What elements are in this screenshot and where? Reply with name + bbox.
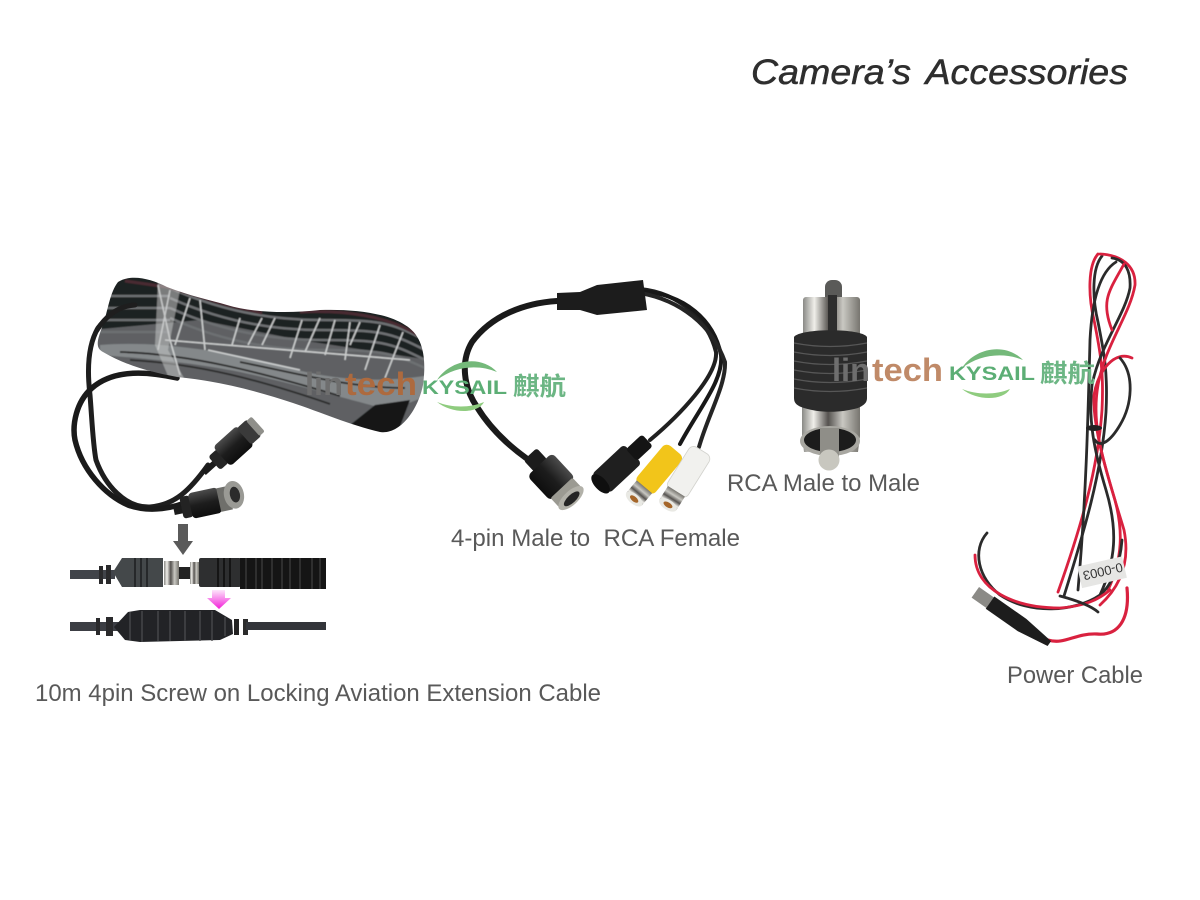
DC plug bbox=[971, 586, 1053, 650]
watermark: right: 麒航 bbox=[1040, 360, 1095, 388]
diagram: locked connectors bbox=[70, 610, 326, 642]
cable label tag: 0-0003 bbox=[1081, 560, 1124, 583]
arrow: pink down arrow bbox=[207, 590, 231, 609]
DC socket bbox=[587, 431, 656, 497]
cable label tag bbox=[1077, 556, 1127, 588]
moulded splitter bbox=[557, 280, 647, 315]
label: RCA coupler: RCA Male to Male bbox=[727, 470, 920, 497]
wire passing at coil edge bbox=[97, 305, 135, 330]
watermark: left: tech bbox=[345, 366, 417, 402]
watermark: left: 麒航 bbox=[513, 373, 566, 401]
adapter cables bbox=[465, 289, 725, 458]
lower connector bbox=[170, 479, 247, 522]
white RCA bbox=[655, 444, 712, 515]
tail to stripped ends bbox=[979, 533, 1122, 609]
watermark: right: KYSAIL bbox=[949, 364, 1035, 385]
watermark: right bbox=[832, 349, 1095, 398]
loose cable loops bbox=[74, 306, 208, 509]
shrink-wrapped coil bbox=[98, 278, 424, 432]
main strand 2 bbox=[1096, 254, 1135, 590]
label: adapter: 4-pin Male to RCA Female bbox=[451, 525, 740, 552]
red lead to plug bbox=[1048, 588, 1127, 641]
product: power cable bbox=[971, 254, 1135, 650]
upper right small loop bbox=[1094, 356, 1132, 605]
cable tie bbox=[1086, 425, 1102, 431]
watermark: right: lin bbox=[832, 352, 870, 388]
diagram: unlocked connectors bbox=[70, 558, 326, 589]
label: extension cable: 10m 4pin Screw on Locking Aviation Extension Cable bbox=[35, 680, 601, 707]
title: Camera’s Accessories bbox=[751, 53, 1128, 92]
watermark: left bbox=[305, 361, 566, 411]
product: 4-pin male to RCA female adapter bbox=[465, 280, 725, 515]
arrow: grey down arrow bbox=[173, 524, 193, 555]
product: RCA male to male coupler bbox=[794, 280, 867, 470]
label: power cable: Power Cable bbox=[1007, 662, 1143, 689]
watermark: right: tech bbox=[872, 352, 943, 388]
watermark: left: lin bbox=[305, 366, 343, 402]
main strand 1 bbox=[1058, 254, 1103, 592]
main strand 3 bbox=[1078, 262, 1116, 590]
product: 10m extension cable coil bbox=[74, 270, 430, 522]
yellow RCA bbox=[622, 442, 684, 511]
4-pin plug bbox=[518, 443, 588, 515]
upper connector bbox=[195, 414, 267, 482]
watermark: left: KYSAIL bbox=[422, 378, 507, 399]
